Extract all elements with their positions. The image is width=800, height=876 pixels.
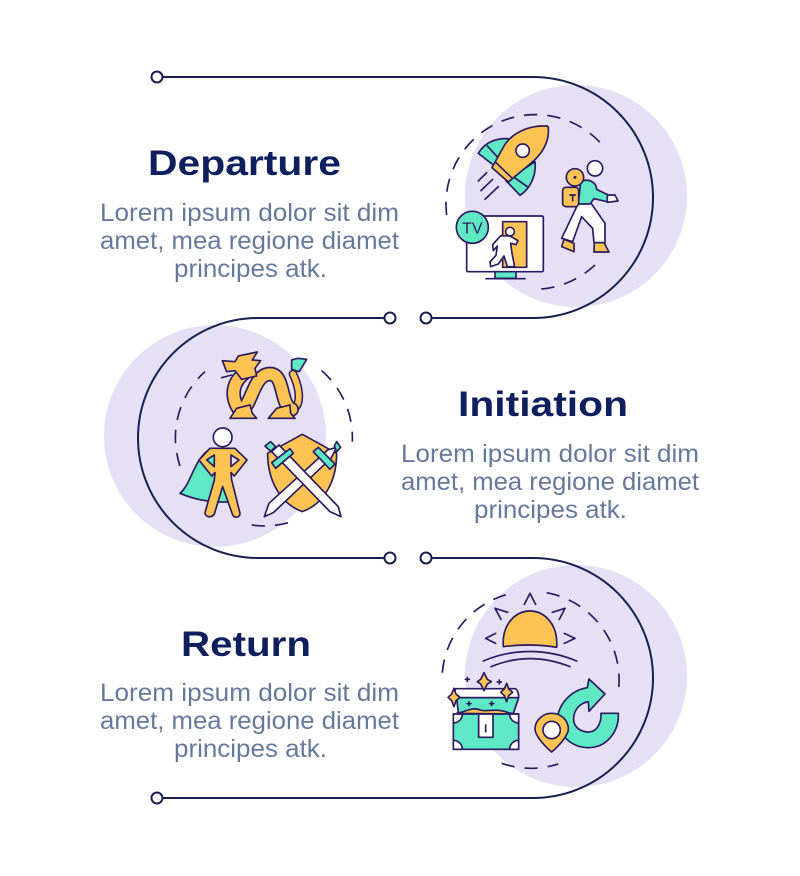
text block: departure description: amet, mea regione diamet: [100, 227, 399, 255]
heading: Return: Return: [181, 625, 311, 664]
text block: initiation description: Lorem ipsum dolor sit dim: [401, 440, 699, 468]
heading: Departure: Departure: [148, 144, 341, 183]
text block: return description: amet, mea regione diamet: [100, 707, 399, 735]
icon: shield and crossed swords: [264, 434, 341, 517]
icon: rocket: [478, 126, 548, 199]
text block: initiation description: amet, mea regione diamet: [401, 468, 699, 496]
heading: Initiation: Initiation: [458, 385, 628, 424]
icon group: departure: [446, 115, 618, 289]
lilac circle: return: [465, 565, 687, 787]
text block: return description: principes atk.: [174, 735, 327, 763]
panel: return: [100, 552, 687, 804]
connector line: initiation: [138, 312, 396, 564]
text block: departure description: principes atk.: [174, 255, 327, 283]
text block: return description: [100, 679, 399, 763]
icon: return arrow: [557, 679, 618, 748]
icon: television with fleeing figure: TV: [462, 220, 483, 237]
icon: location pin: [535, 713, 568, 752]
lilac circle: departure: [465, 85, 687, 307]
connector line: departure: [152, 72, 653, 324]
panel: departure: [100, 72, 687, 324]
text block: initiation description: principes atk.: [474, 496, 627, 524]
text block: departure description: [100, 199, 399, 283]
lilac circle: initiation: [104, 325, 326, 547]
icon group: initiation: [175, 352, 352, 526]
connector line: return: [152, 552, 653, 804]
icon: hiker: [562, 161, 618, 252]
panel: initiation: [104, 312, 699, 564]
icon: rising sun: [483, 593, 577, 667]
icon: dragon: [222, 352, 307, 418]
icon: caped hero: [180, 428, 247, 517]
icon: television with fleeing figure: [456, 211, 543, 279]
text block: initiation description: [401, 440, 699, 524]
icon group: return: [442, 593, 619, 768]
icon: treasure chest: [448, 673, 519, 749]
text block: return description: Lorem ipsum dolor sit dim: [100, 679, 399, 707]
text block: departure description: Lorem ipsum dolor sit dim: [100, 199, 399, 227]
